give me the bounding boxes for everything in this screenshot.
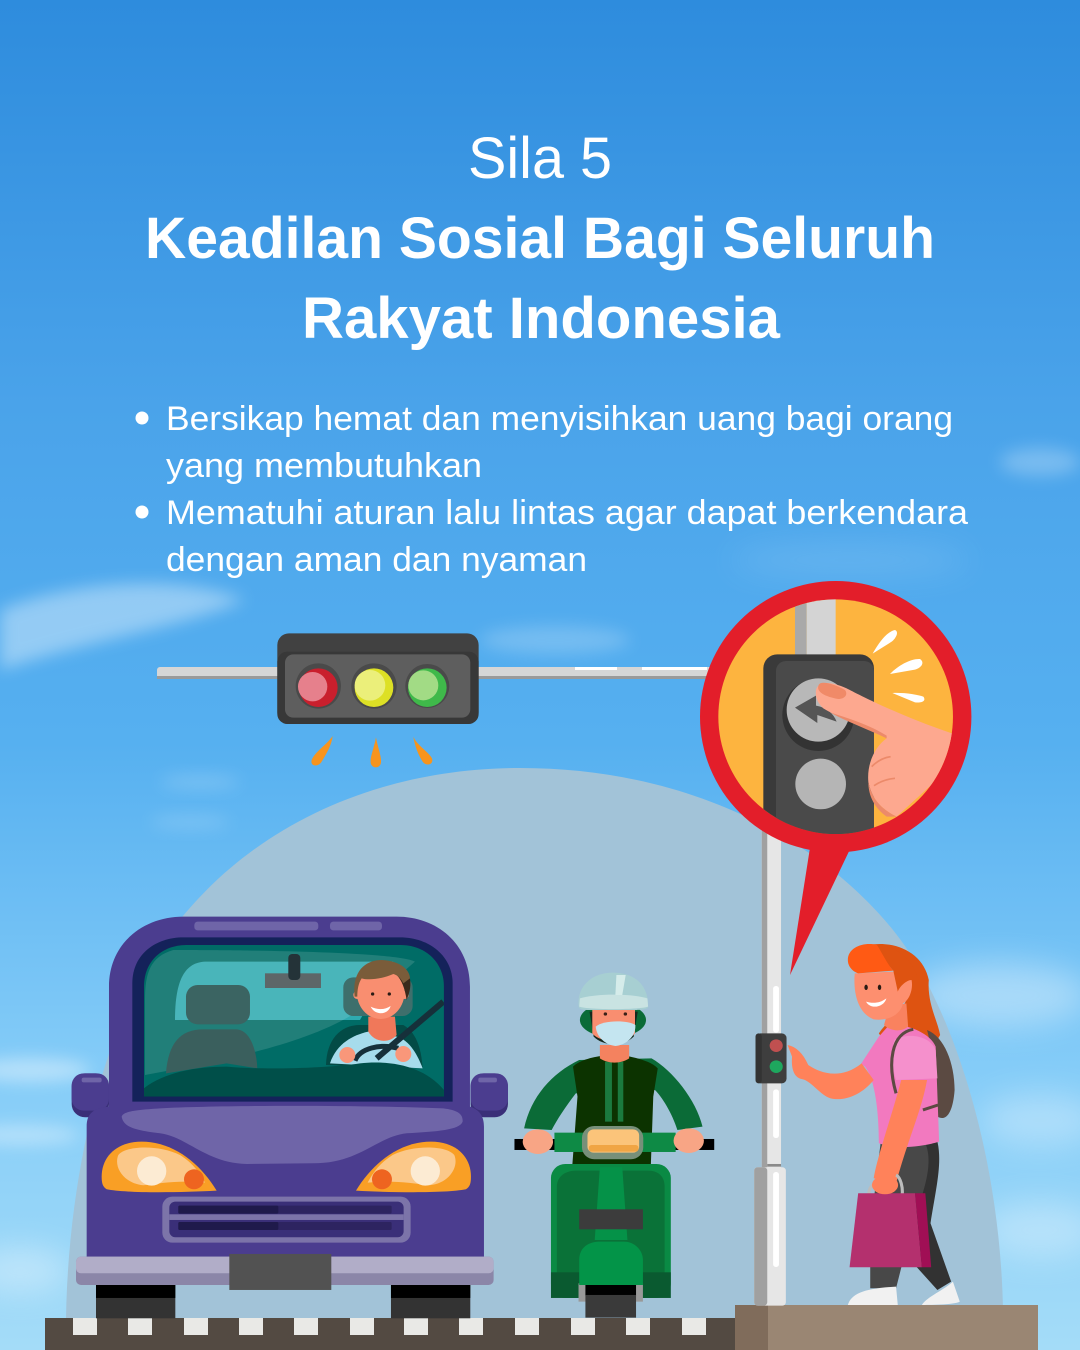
callout: pressing the button [700,581,971,975]
title: Keadilan Sosial Bagi Seluruh Rakyat Indonesia [145,206,935,351]
grille [162,1197,411,1243]
car [72,917,508,1318]
side mirrors [72,1073,508,1117]
road [45,1318,735,1350]
backpack strap [892,1029,938,1110]
arm holding bag [874,1080,927,1183]
light rays [311,736,432,767]
rear view mirror [265,954,321,988]
signal pole [754,830,787,1306]
title: Keadilan Sosial Bagi Seluruh Rakyat Indonesia: Keadilan Sosial Bagi Seluruh [145,206,935,271]
hood [122,1106,463,1164]
headlights [102,1142,471,1192]
arm pressing button [788,1045,874,1099]
windshield [132,937,453,1102]
backpack [927,1030,955,1118]
traffic light arm [157,667,717,679]
pedestrian woman [788,944,960,1305]
bumper [76,1254,494,1290]
rear seat [166,985,257,1073]
handlebar [514,1126,714,1159]
bullet list: dengan aman dan nyaman [166,541,587,579]
press sparks [873,630,924,703]
scooter body [551,1164,671,1318]
scooter and rider [514,973,714,1318]
bullet list [136,400,969,579]
driver [326,960,443,1068]
traffic light [277,633,479,767]
rider [524,973,703,1165]
pedestrian button box [756,1033,787,1083]
hair back [869,944,940,1048]
trousers [870,1142,951,1290]
title: Keadilan Sosial Bagi Seluruh Rakyat Indonesia: Rakyat Indonesia [302,286,781,351]
heading: Sila 5: Sila 5 [468,126,612,191]
bullet list: Bersikap hemat dan menyisihkan uang bagi orang [166,400,953,438]
shirt [861,1025,939,1147]
bullet list: Mematuhi aturan lalu lintas agar dapat berkendara [166,494,969,532]
bullet list: yang membutuhkan [166,447,482,485]
neck and face [848,944,918,1030]
sidewalk [735,1305,1038,1350]
shoes [848,1282,960,1305]
wheels [96,1283,470,1318]
background dome [66,768,1003,1350]
shopping bag [850,1175,931,1267]
car body [87,917,484,1258]
